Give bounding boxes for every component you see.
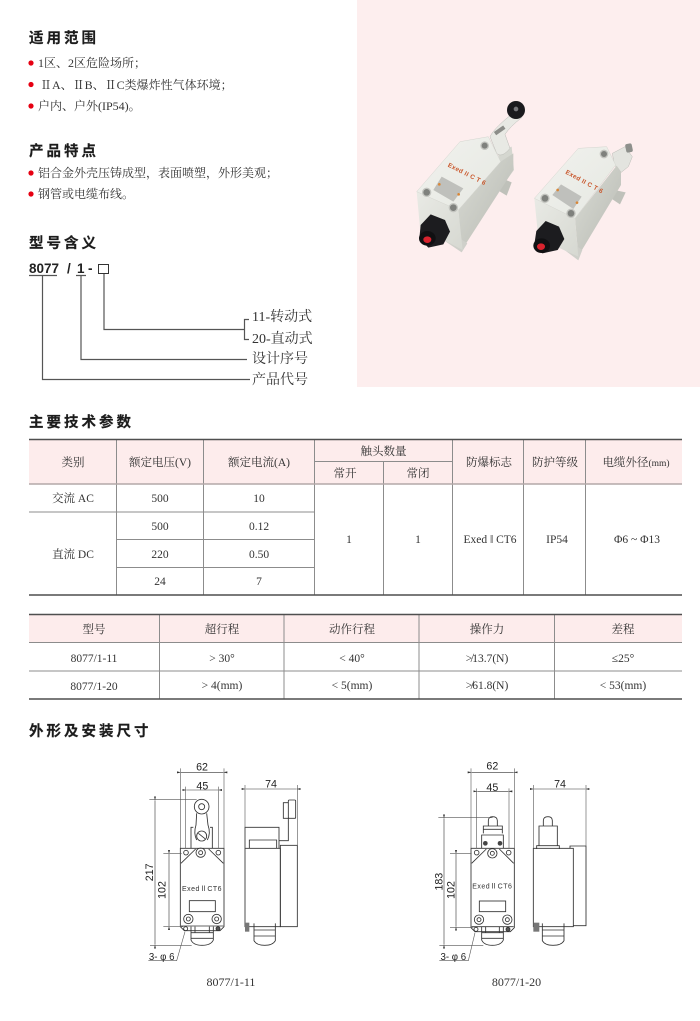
table header text bbox=[82, 622, 635, 636]
table body text: 1 bbox=[415, 534, 421, 546]
table header text: 防护等级 bbox=[532, 455, 578, 469]
mounting screws bbox=[541, 150, 608, 217]
bullet list: application scope: 户内、户外(IP54)。 bbox=[38, 98, 141, 113]
table header text: 型号 bbox=[82, 622, 106, 636]
table body text: ≤25° bbox=[612, 653, 635, 665]
table body text: ≯13.7(N) bbox=[466, 653, 508, 665]
table body text: IP54 bbox=[546, 534, 568, 546]
switch body bbox=[417, 137, 513, 252]
mounting screws bbox=[423, 142, 488, 212]
table body text: 0.12 bbox=[249, 521, 269, 533]
panel: product photo background bbox=[357, 0, 700, 387]
explosion-proof mark: Exed II C T 6 bbox=[564, 169, 604, 195]
table: electrical parameters bbox=[29, 440, 682, 595]
heading: product features: 产品特点 bbox=[29, 142, 99, 160]
table header text: 触头数量 bbox=[360, 444, 406, 458]
table body text: 0.50 bbox=[249, 549, 269, 561]
front view bbox=[471, 817, 514, 945]
cable gland bbox=[419, 214, 450, 248]
bullet list: application scope: 1区、2区危险场所； bbox=[38, 55, 146, 70]
dimension drawing: 8077/1-11 bbox=[144, 762, 297, 963]
table body text: > 30° bbox=[209, 653, 235, 665]
section: model meaning bbox=[29, 234, 313, 388]
bullet list: product features: 钢管或电缆布线。 bbox=[38, 186, 134, 201]
model code labels: 设计序号 bbox=[252, 350, 308, 367]
model code labels: 11-转动式 bbox=[252, 308, 312, 325]
heading: outline and mounting dimensions: 外形及安装尺寸 bbox=[29, 723, 152, 740]
dimension values: 183 bbox=[433, 873, 445, 891]
model code labels: 产品代号 bbox=[252, 371, 308, 388]
table body text: 交流 AC bbox=[52, 491, 94, 505]
section: application scope bbox=[28, 30, 233, 113]
table header text: 电缆外径(mm) bbox=[602, 455, 670, 469]
table body text: 直流 DC bbox=[52, 547, 94, 561]
dimension values: 45 bbox=[196, 781, 208, 793]
bullet list: product features: 铝合金外壳压铸成型，表面喷塑，外形美观； bbox=[38, 165, 278, 180]
table body text: 24 bbox=[154, 576, 166, 588]
table header text: 防爆标志 bbox=[466, 455, 512, 469]
dimension values: 74 bbox=[265, 778, 277, 790]
caption: 8077/1-20: 8077/1-20 bbox=[492, 975, 541, 989]
plunger bbox=[612, 143, 633, 173]
model code bbox=[29, 261, 108, 276]
table body text bbox=[52, 491, 660, 588]
nameplate bbox=[433, 177, 463, 202]
table body text: 10 bbox=[253, 493, 265, 505]
table: mechanical parameters bbox=[29, 614, 682, 699]
dimension values bbox=[144, 762, 277, 963]
front view: ExedⅡCT6 bbox=[182, 885, 222, 893]
table body text: 500 bbox=[151, 493, 169, 505]
heading: main technical parameters: 主要技术参数 bbox=[29, 413, 134, 431]
bullet list: product features bbox=[28, 165, 278, 201]
table header text: 动作行程 bbox=[329, 622, 375, 636]
table header text: 常开 bbox=[334, 466, 357, 480]
dimension lines bbox=[148, 768, 297, 961]
table body text: 220 bbox=[151, 549, 169, 561]
nameplate bbox=[552, 184, 582, 209]
table grid lines bbox=[29, 614, 682, 699]
table header background bbox=[29, 440, 682, 484]
model code: - bbox=[88, 261, 92, 276]
table header text: 常闭 bbox=[406, 466, 430, 480]
table body text: 8077/1-20 bbox=[70, 681, 118, 693]
heading: model meaning: 型号含义 bbox=[29, 234, 99, 252]
cable gland bbox=[533, 221, 564, 253]
product photo: direct plunger switch bbox=[533, 143, 633, 260]
bullet list: application scope bbox=[28, 55, 233, 113]
model code labels bbox=[252, 308, 313, 388]
table header background bbox=[29, 615, 682, 642]
model code: 1 bbox=[77, 261, 85, 276]
table body text: > 4(mm) bbox=[202, 680, 242, 692]
model code leader lines bbox=[29, 274, 250, 380]
table header text bbox=[62, 444, 670, 480]
table header text: 差程 bbox=[612, 622, 635, 636]
dimension values: 3- φ 6 bbox=[149, 952, 174, 963]
table body text: < 5(mm) bbox=[332, 680, 372, 692]
table header text: 超行程 bbox=[205, 622, 240, 636]
table body text: < 40° bbox=[339, 653, 365, 665]
model code: / bbox=[67, 261, 71, 276]
table header text: 操作力 bbox=[470, 622, 504, 636]
table body text: < 53(mm) bbox=[600, 680, 646, 692]
bullet list: application scope: ⅡA、ⅡB、ⅡC类爆炸性气体环境； bbox=[40, 77, 233, 92]
side view bbox=[533, 817, 586, 945]
heading: application scope: 适用范围 bbox=[29, 30, 99, 47]
table body text: 7 bbox=[256, 576, 262, 588]
explosion-proof mark: Exed II C T 6 bbox=[446, 162, 487, 187]
dimension values: 74 bbox=[554, 778, 566, 790]
table header text: 额定电流(A) bbox=[228, 455, 290, 469]
dimension lines bbox=[438, 768, 586, 961]
dimension values: 217 bbox=[144, 863, 156, 881]
product photo: rotary lever switch bbox=[417, 101, 525, 252]
table header text: 额定电压(V) bbox=[129, 455, 191, 469]
front view: ExedⅡCT6 bbox=[472, 882, 512, 890]
table grid lines bbox=[29, 440, 682, 595]
table body text: 500 bbox=[151, 521, 169, 533]
side view bbox=[245, 800, 297, 945]
table body text: Exed ‖ CT6 bbox=[463, 534, 517, 546]
table body text: 1 bbox=[346, 534, 352, 546]
table header text: 类别 bbox=[62, 455, 84, 469]
table body text: ≯61.8(N) bbox=[466, 680, 508, 692]
dimension values: 3- φ 6 bbox=[441, 952, 466, 963]
front view bbox=[180, 799, 224, 945]
model code labels: 20-直动式 bbox=[252, 330, 313, 347]
dimension values: 62 bbox=[196, 762, 208, 774]
caption: 8077/1-11: 8077/1-11 bbox=[207, 975, 255, 989]
section: product features bbox=[28, 142, 278, 201]
dimension values: 102 bbox=[445, 881, 457, 899]
dimension values: 62 bbox=[486, 761, 498, 773]
table body text bbox=[70, 653, 646, 693]
table body text: 8077/1-11 bbox=[71, 653, 118, 665]
dimension values: 102 bbox=[157, 881, 169, 899]
table body text: Φ6 ~ Φ13 bbox=[614, 534, 660, 546]
dimension drawing: 8077/1-20 bbox=[433, 761, 586, 963]
dimension values: 45 bbox=[486, 782, 498, 794]
model code: 8077 bbox=[29, 261, 59, 276]
dimension values bbox=[433, 761, 566, 963]
lever and roller bbox=[490, 101, 525, 182]
